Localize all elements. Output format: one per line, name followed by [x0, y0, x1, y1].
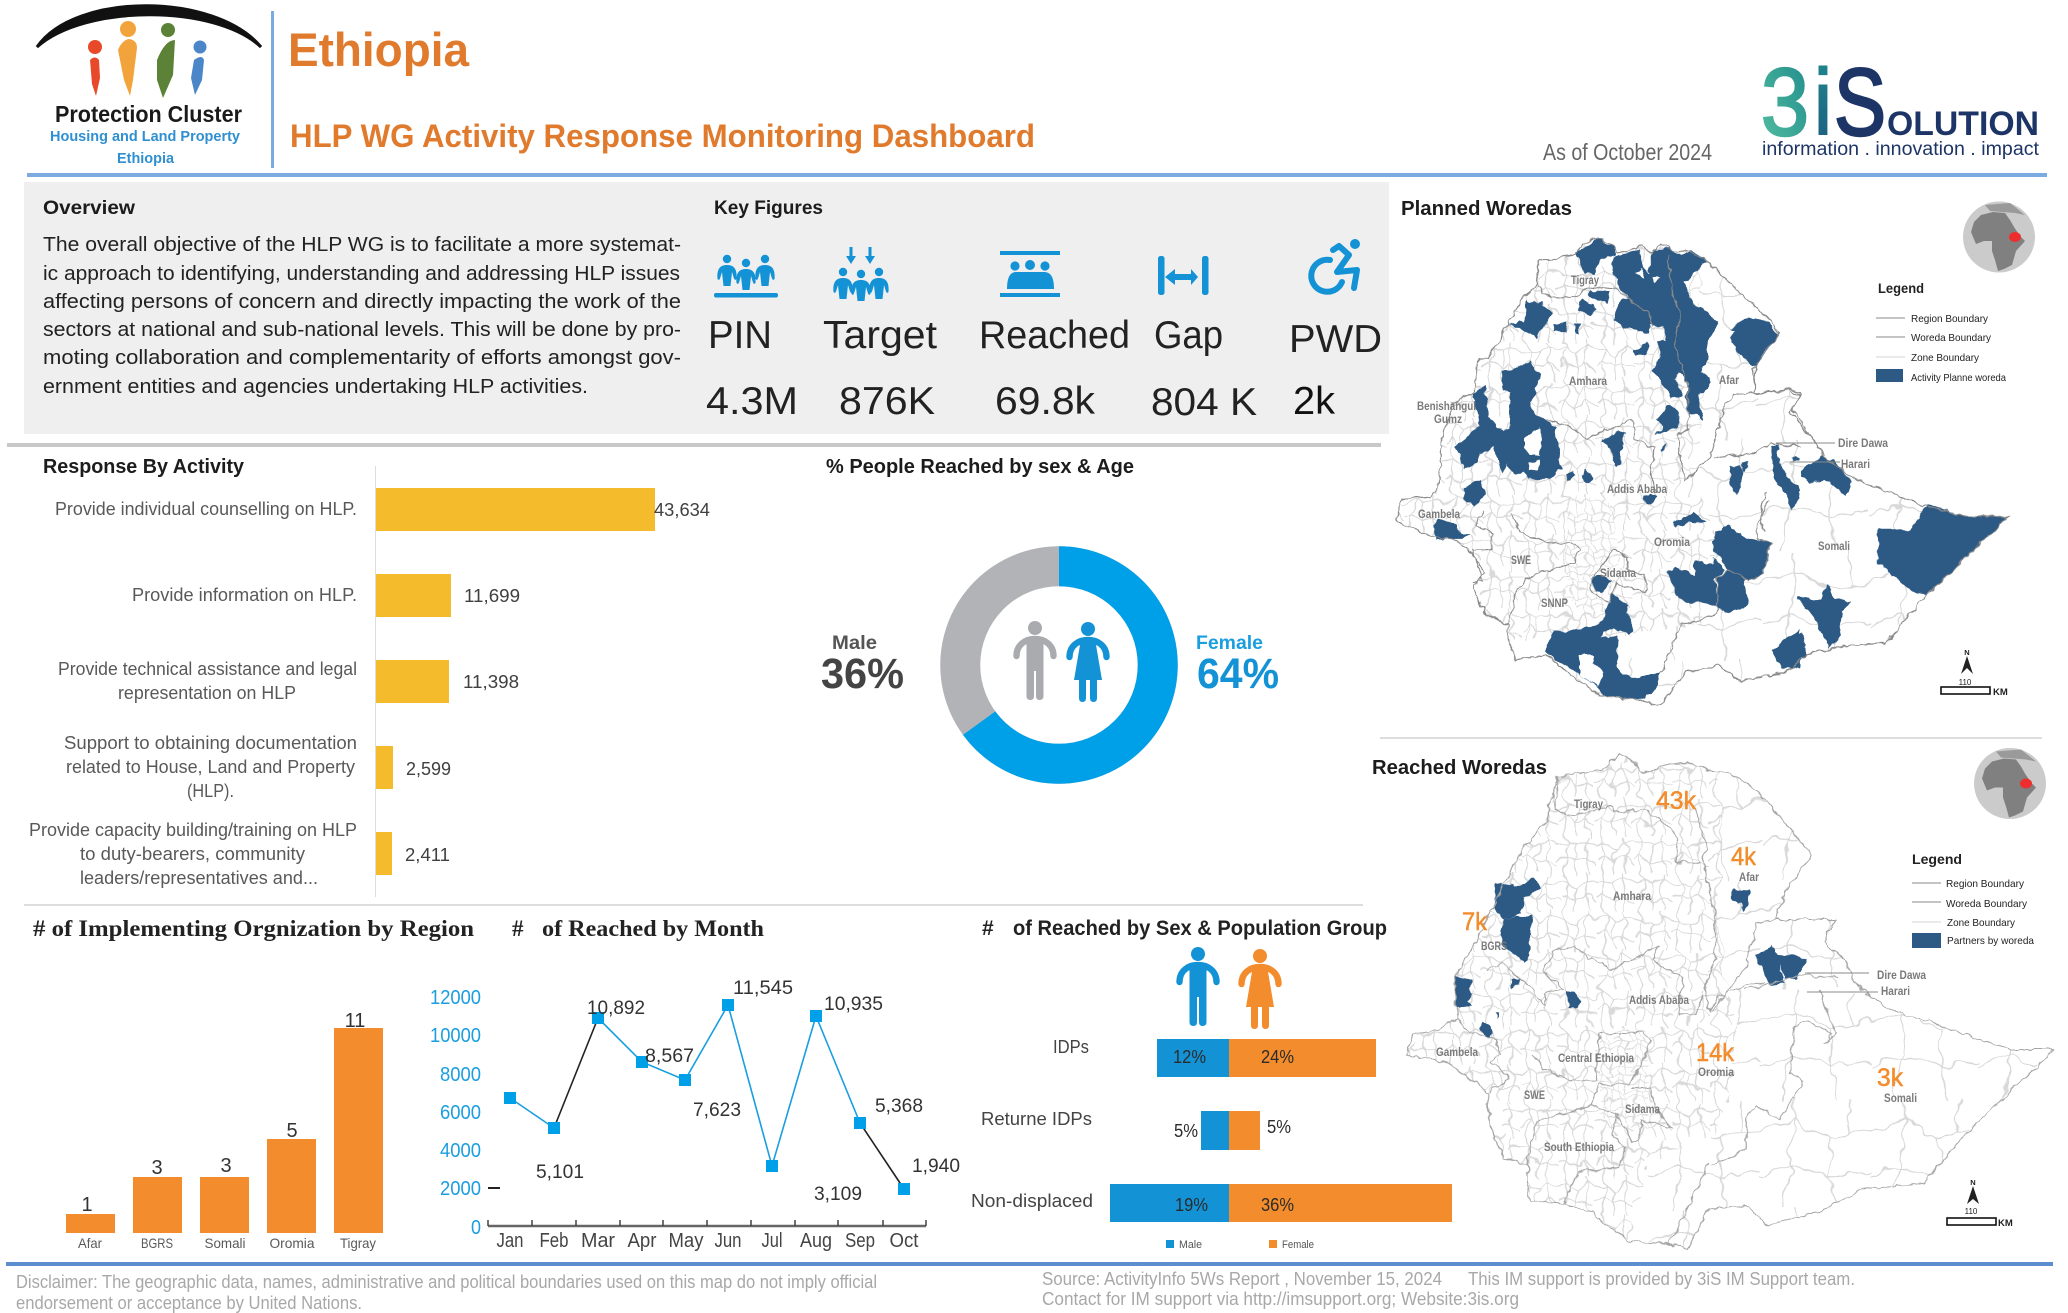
category labels: Provide information on HLP. — [132, 585, 357, 605]
region labels: reached: Tigray — [1574, 797, 1603, 811]
heading hash: # — [982, 917, 994, 940]
icon: Gap — [1158, 256, 1208, 295]
month labels: Jan — [496, 1230, 524, 1252]
reached values on map: 14k — [1696, 1039, 1734, 1067]
reached values on map: 4k — [1731, 843, 1756, 871]
label: PWD: PWD — [1289, 318, 1382, 361]
icon: Reached — [1000, 251, 1060, 297]
region labels: reached: Harari — [1881, 984, 1910, 998]
scale bar and north arrow — [1941, 648, 2008, 698]
icon: female — [1242, 949, 1278, 1029]
source and contact: This IM support is provided by 3iS IM Support team. — [1468, 1269, 1855, 1289]
source and contact — [1042, 1269, 1855, 1309]
category labels: Provide individual counselling on HLP. — [55, 499, 357, 519]
logo arc — [37, 6, 261, 47]
donut chart — [960, 566, 1158, 764]
legend: Zone Boundary — [1947, 917, 2016, 929]
scale bar and north arrow: 110 — [1965, 1207, 1978, 1216]
region labels: reached: SWE — [1524, 1088, 1545, 1102]
legend — [1166, 1239, 1314, 1251]
map fill: planned woredas north — [1500, 236, 1852, 528]
data labels: 5,368 — [875, 1096, 923, 1117]
panel: people reached by sex and age — [821, 456, 1279, 764]
map fill: reached woredas — [1455, 878, 1806, 1039]
map boundaries: planned — [1395, 237, 2009, 705]
overview text: ernment entities and agencies undertaking HLP activities. — [43, 376, 588, 398]
y axis labels — [430, 987, 481, 1239]
scale bar and north arrow: KM — [1993, 687, 2008, 698]
disclaimer — [16, 1272, 877, 1313]
heading: Response By Activity — [43, 456, 245, 478]
region labels: planned: SNNP — [1541, 596, 1568, 610]
heading: Planned Woredas — [1401, 198, 1572, 220]
category labels: leaders/representatives and... — [80, 868, 318, 888]
scale bar and north arrow: KM — [1998, 1218, 2013, 1229]
legend: Partners by woreda — [1947, 935, 2034, 947]
region labels: planned: Sidama — [1600, 566, 1636, 580]
logo subtitle: Housing and Land Property — [50, 128, 241, 145]
region labels: reached: Gambela — [1436, 1045, 1478, 1059]
data labels: 10,892 — [587, 998, 645, 1019]
panel: reached by sex and population group — [971, 917, 1452, 1251]
y axis labels: 8000 — [440, 1064, 481, 1086]
label: PIN: PIN — [708, 314, 772, 357]
key figures heading: Key Figures — [714, 198, 823, 219]
month labels: Oct — [890, 1230, 919, 1252]
map shapes: reached woredas and boundaries — [1406, 754, 2054, 1247]
region labels: planned: Oromia — [1654, 535, 1690, 549]
label: Gap: Gap — [1154, 314, 1223, 357]
panel: reached by month — [430, 916, 960, 1252]
overview text: The overall objective of the HLP WG is to facilitate a more systemat- — [43, 234, 681, 256]
data labels — [536, 978, 960, 1205]
bar values: 11,398 — [463, 672, 519, 692]
reached values on map: 7k — [1462, 908, 1487, 936]
bar values: 2,411 — [405, 845, 450, 865]
category labels: (HLP). — [187, 781, 234, 801]
bar values: 11,699 — [464, 586, 520, 606]
y axis labels: 10000 — [430, 1025, 481, 1047]
map shapes: planned woredas and boundaries — [1395, 236, 2009, 705]
y axis labels: 0 — [471, 1217, 481, 1239]
legend: Woreda Boundary — [1911, 332, 1992, 344]
category labels: to duty-bearers, community — [80, 844, 305, 864]
category labels: representation on HLP — [118, 683, 296, 703]
logo numeral: 3 — [1761, 49, 1809, 156]
logo figures — [88, 21, 206, 98]
disclaimer: Disclaimer: The geographic data, names, administrative and political boundaries used on this map do not imply official — [16, 1272, 877, 1292]
bar values: 43,634 — [654, 500, 710, 520]
y axis labels: 12000 — [430, 987, 481, 1009]
subtitle: HLP WG Activity Response Monitoring Dashboard — [290, 118, 1035, 154]
bar values — [405, 500, 710, 865]
heading: of Reached by Sex & Population Group — [1013, 917, 1387, 940]
logo S: S — [1834, 49, 1886, 156]
region labels: planned — [1417, 273, 1888, 610]
header divider — [271, 11, 274, 168]
logo country: Ethiopia — [117, 150, 175, 167]
label: Reached: Reached — [979, 314, 1130, 357]
month labels: Jun — [714, 1230, 742, 1252]
scale bar and north arrow: N — [1964, 648, 1970, 657]
column values: 3 — [220, 1155, 232, 1177]
male percent: 36% — [821, 650, 904, 698]
month labels: Aug — [800, 1230, 832, 1252]
row labels: IDPs — [1053, 1037, 1089, 1057]
legend: Male — [1179, 1239, 1202, 1251]
footer rule — [6, 1262, 2053, 1266]
scale bar and north arrow — [1947, 1178, 2013, 1229]
overview text: sectors at national and sub-national levels. This will be done by pro- — [43, 319, 681, 341]
column values: 5 — [286, 1120, 298, 1142]
label: Target: Target — [823, 314, 937, 357]
bar values: 19% — [1175, 1195, 1208, 1215]
column labels: Oromia — [270, 1235, 315, 1251]
region labels: reached: South Ethiopia — [1544, 1140, 1614, 1154]
region labels: reached — [1436, 797, 1926, 1154]
row labels: Returne IDPs — [981, 1109, 1092, 1129]
data labels: 1,940 — [912, 1156, 960, 1177]
bar values — [1173, 1047, 1294, 1215]
icon: Target — [833, 247, 889, 301]
scale bar and north arrow: 110 — [1959, 678, 1972, 687]
column labels: Afar — [78, 1235, 102, 1251]
heading: Reached Woredas — [1372, 757, 1547, 779]
header: protection cluster logo — [37, 6, 261, 167]
data labels: 8,567 — [645, 1046, 694, 1067]
female label: Female — [1196, 633, 1263, 654]
legend — [1876, 280, 2006, 384]
icon: PWD — [1311, 239, 1360, 292]
line series — [510, 1005, 904, 1189]
month labels — [496, 1230, 919, 1252]
region labels: reached: Amhara — [1613, 889, 1651, 903]
heading text: of Reached by Month — [542, 916, 764, 941]
map fill: planned woredas west and east — [1455, 385, 2009, 669]
heading: # — [512, 916, 524, 941]
map boundaries: reached — [1406, 754, 2054, 1247]
region labels: reached: Dire Dawa — [1877, 968, 1926, 982]
region labels: planned: Addis Ababa — [1607, 482, 1667, 496]
panel: implementing organizations by region — [33, 916, 474, 1251]
column labels: Somali — [204, 1235, 246, 1251]
value: Target: 876K — [839, 380, 935, 423]
category labels: Support to obtaining documentation — [64, 733, 357, 753]
column values — [81, 1010, 365, 1216]
row labels: Non-displaced — [971, 1191, 1093, 1211]
region labels: reached: Addis Ababa — [1629, 993, 1689, 1007]
data labels: 11,545 — [733, 978, 793, 999]
region labels: reached: Somali — [1884, 1091, 1917, 1105]
legend: Zone Boundary — [1911, 352, 1980, 364]
data labels: 10,935 — [824, 994, 883, 1015]
source and contact: Source: ActivityInfo 5Ws Report , November 15, 2024 — [1042, 1269, 1442, 1289]
axis — [488, 1187, 926, 1226]
data labels: 7,623 — [693, 1100, 741, 1121]
date: As of October 2024 — [1543, 139, 1712, 165]
legend: Region Boundary — [1911, 313, 1989, 325]
region labels: planned: Gambela — [1418, 507, 1460, 521]
y axis labels: 6000 — [440, 1102, 481, 1124]
reached values on map: 3k — [1877, 1064, 1903, 1092]
region labels: planned: Harari — [1841, 457, 1870, 471]
female percent: 64% — [1197, 650, 1279, 698]
legend — [1912, 851, 2034, 948]
bar values: 24% — [1261, 1047, 1294, 1067]
category labels: Provide technical assistance and legal — [58, 659, 357, 679]
month labels: Apr — [628, 1230, 657, 1252]
region labels: planned: Gumz — [1434, 412, 1462, 426]
woreda web — [1398, 242, 1938, 696]
icon: PIN — [714, 255, 778, 298]
line markers — [504, 999, 910, 1195]
bar values: 36% — [1261, 1195, 1294, 1215]
reached values on map — [1462, 787, 1903, 1092]
legend: Activity Planne woreda — [1911, 372, 2006, 384]
overview text: moting collaboration and complementarity of efforts amongst gov- — [43, 347, 681, 369]
region labels: planned: Amhara — [1569, 374, 1607, 388]
icon: male — [1180, 947, 1216, 1026]
icon: female — [1070, 622, 1106, 702]
region labels: reached: Sidama — [1625, 1102, 1660, 1116]
locator globe — [1974, 748, 2046, 819]
logo i: i — [1814, 49, 1832, 156]
region labels: planned: Somali — [1818, 539, 1850, 553]
header rule — [27, 173, 2047, 177]
legend: Legend — [1878, 280, 1924, 296]
bar values: 5% — [1267, 1117, 1291, 1137]
legend: Region Boundary — [1946, 878, 2025, 890]
legend: Legend — [1912, 851, 1962, 867]
overview text: ic approach to identifying, understanding and addressing HLP issues — [43, 263, 680, 285]
column values: 11 — [345, 1010, 365, 1032]
region labels: reached: Afar — [1739, 870, 1759, 884]
logo wordmark: OLUTION — [1887, 105, 2039, 143]
value: PWD: 2k — [1293, 380, 1335, 423]
value: Reached: 69.8k — [995, 380, 1096, 423]
column chart — [66, 1028, 383, 1233]
region labels: reached: Oromia — [1698, 1065, 1734, 1079]
legend: Woreda Boundary — [1946, 898, 2028, 910]
scale bar and north arrow: N — [1970, 1178, 1976, 1187]
bar values: 12% — [1173, 1047, 1206, 1067]
category labels: Provide capacity building/training on HLP — [29, 820, 357, 840]
bar values: 5% — [1174, 1121, 1198, 1141]
icon: male — [1016, 621, 1054, 700]
value: Gap: 804 K — [1151, 381, 1257, 424]
source and contact: Contact for IM support via http://imsupport.org; Website:3is.org — [1042, 1289, 1519, 1309]
data labels: 5,101 — [536, 1162, 584, 1183]
region labels: planned: Benishangul — [1417, 399, 1476, 413]
month labels: Jul — [762, 1230, 782, 1252]
panel: overview and key figures — [24, 182, 1389, 434]
woreda web — [1380, 750, 2068, 1260]
reached values on map: 43k — [1656, 787, 1696, 815]
legend: Female — [1282, 1239, 1314, 1251]
map fill: planned woredas south — [1432, 513, 1800, 699]
month labels: May — [668, 1230, 704, 1252]
heading: % People Reached by sex & Age — [826, 456, 1134, 478]
column values: 1 — [81, 1194, 93, 1216]
y axis labels: 2000 — [440, 1178, 481, 1200]
heading: # of Implementing Orgnization by Region — [33, 916, 474, 941]
column labels: Tigray — [340, 1235, 376, 1251]
category labels — [29, 499, 357, 888]
month labels: Sep — [845, 1230, 875, 1252]
region labels: reached: Central Ethiopia — [1558, 1051, 1634, 1065]
y axis labels: 4000 — [440, 1140, 481, 1162]
3iS logo — [1761, 49, 2040, 160]
logo tagline: information . innovation . impact — [1762, 139, 2040, 160]
diverging bars — [1110, 1039, 1452, 1222]
region labels: reached: BGRS — [1481, 939, 1507, 953]
region labels: planned: Dire Dawa — [1838, 436, 1888, 450]
map panel: reached woredas — [1372, 748, 2068, 1260]
region labels: planned: Tigray — [1571, 273, 1599, 287]
row labels — [971, 1037, 1093, 1211]
male label: Male — [832, 633, 877, 654]
horizontal bar chart — [375, 466, 655, 897]
bar values: 2,599 — [406, 759, 451, 779]
disclaimer: endorsement or acceptance by United Nations. — [16, 1293, 362, 1313]
category labels: related to House, Land and Property — [66, 757, 355, 777]
title: Ethiopia — [288, 23, 470, 76]
region labels: planned: Afar — [1719, 373, 1739, 387]
column values: 3 — [151, 1157, 163, 1179]
data labels: 3,109 — [814, 1184, 862, 1205]
column labels — [78, 1235, 376, 1251]
overview text: affecting persons of concern and directly impacting the work of the — [43, 291, 681, 313]
overview text — [43, 234, 681, 398]
logo name: Protection Cluster — [55, 101, 242, 127]
column labels: BGRS — [141, 1235, 173, 1251]
panel: response by activity — [29, 456, 710, 897]
month labels: Feb — [540, 1230, 568, 1252]
region labels: planned: SWE — [1511, 553, 1531, 567]
locator globe — [1963, 202, 2035, 272]
overview heading: Overview — [43, 198, 135, 219]
value: PIN: 4.3M — [706, 380, 798, 423]
map panel: planned woredas — [1380, 198, 2068, 720]
month labels: Mar — [581, 1230, 615, 1252]
